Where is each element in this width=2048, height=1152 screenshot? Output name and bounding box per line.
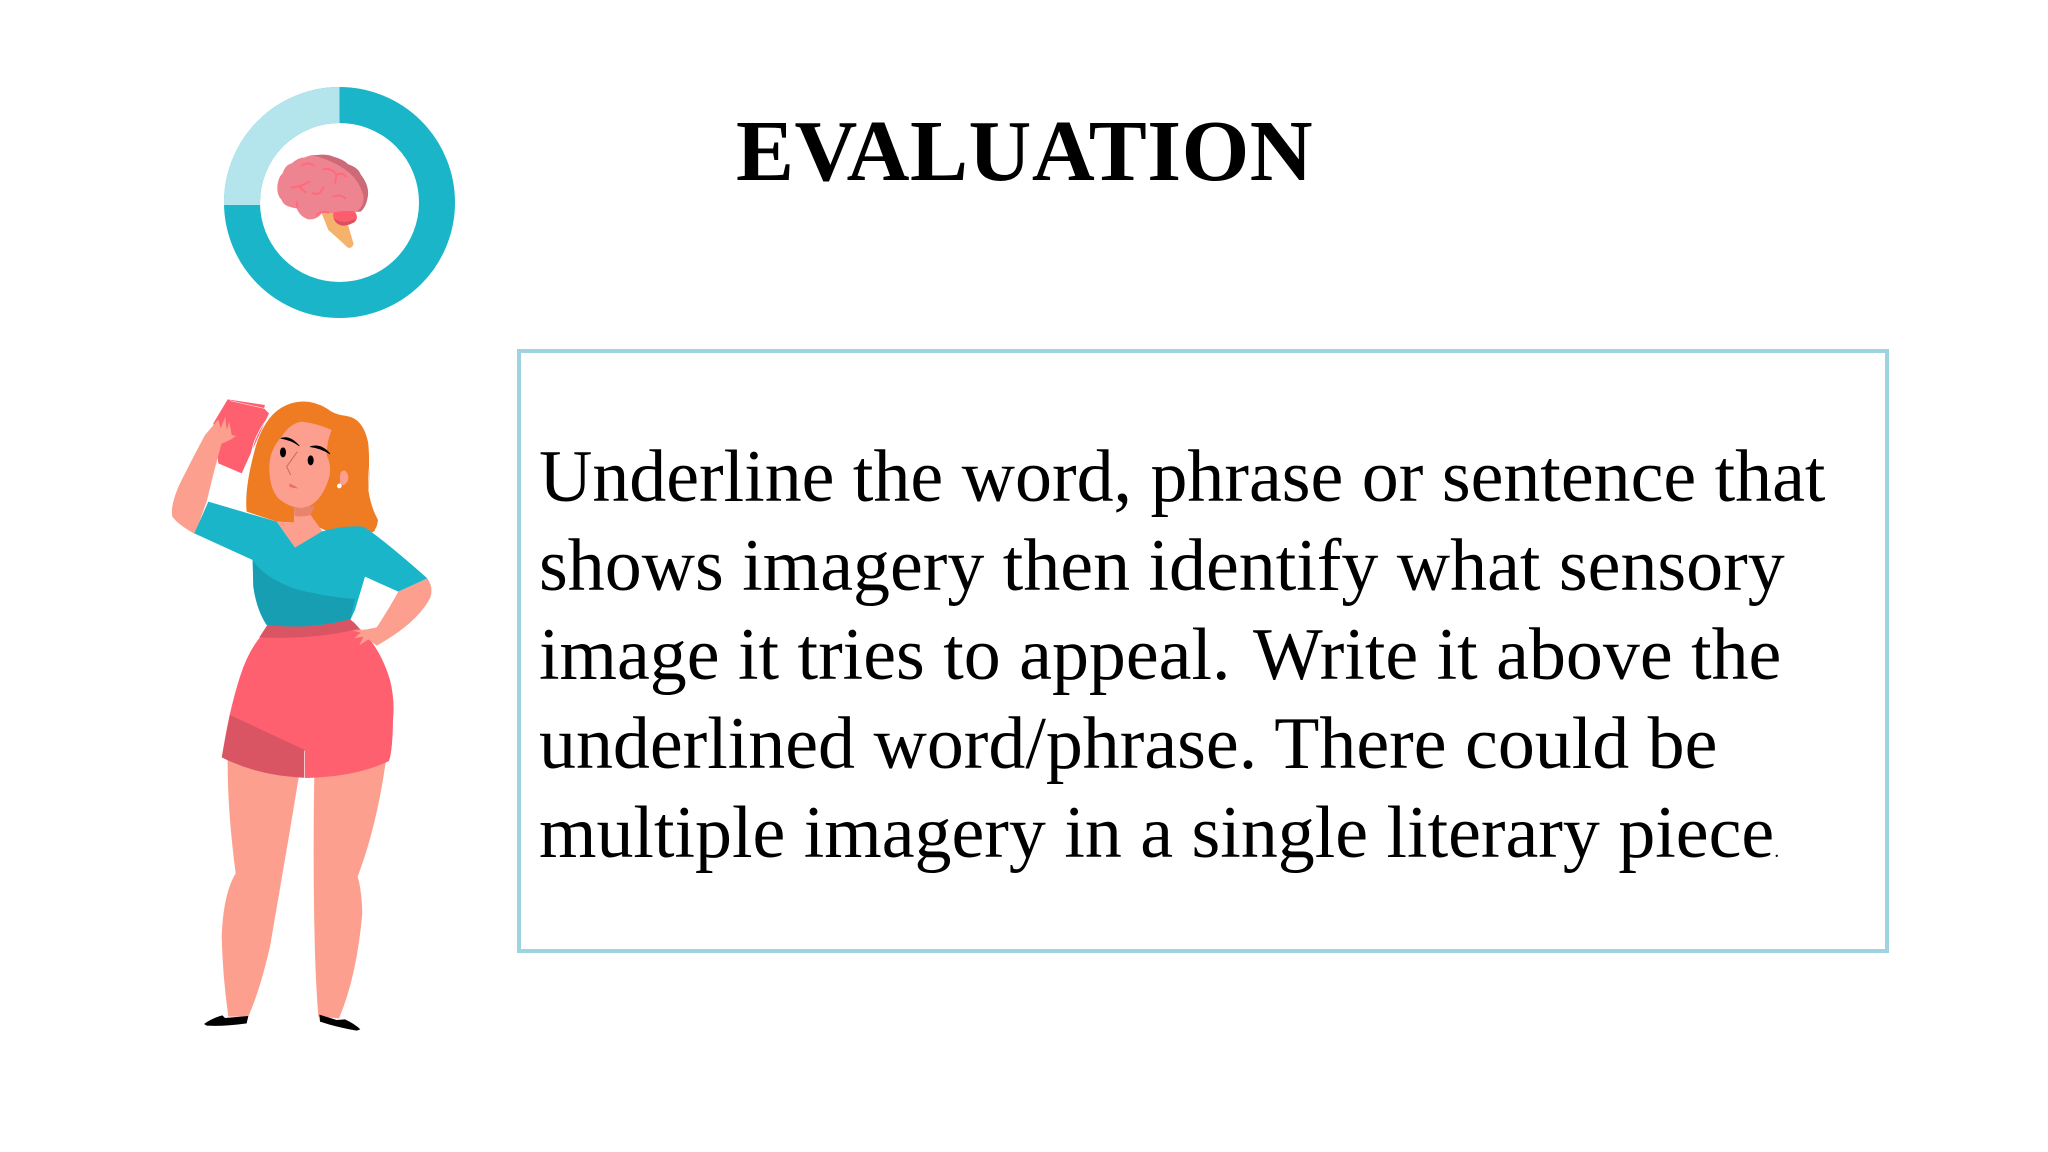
text block: instructions	[539, 434, 1825, 873]
text block: instructions: Underline the word, phrase or sentence that	[539, 434, 1825, 516]
arm: raised holding book	[172, 417, 236, 534]
text block: instructions: shows imagery then identify what sensory	[539, 524, 1785, 606]
panel: instruction box	[517, 349, 1889, 953]
icon: brain	[277, 155, 368, 248]
legs	[222, 760, 386, 1018]
book	[213, 399, 269, 473]
top: teal blouse	[194, 502, 427, 627]
text block: instructions: image it tries to appeal. Write it above the	[539, 612, 1781, 694]
text block: instructions: underlined word/phrase. There could be	[539, 702, 1717, 784]
skirt	[222, 619, 394, 778]
donut ring	[224, 87, 437, 300]
illustration: woman holding book	[172, 399, 431, 1031]
text block: instructions: multiple imagery in a single literary piece.	[539, 790, 1779, 872]
shoes	[204, 1015, 360, 1031]
icon: donut ring with brain	[224, 87, 437, 300]
hair	[244, 402, 378, 532]
title: EVALUATION	[736, 102, 1313, 199]
arm: hand on hip	[353, 578, 431, 646]
neck	[277, 506, 323, 548]
face	[269, 422, 348, 508]
